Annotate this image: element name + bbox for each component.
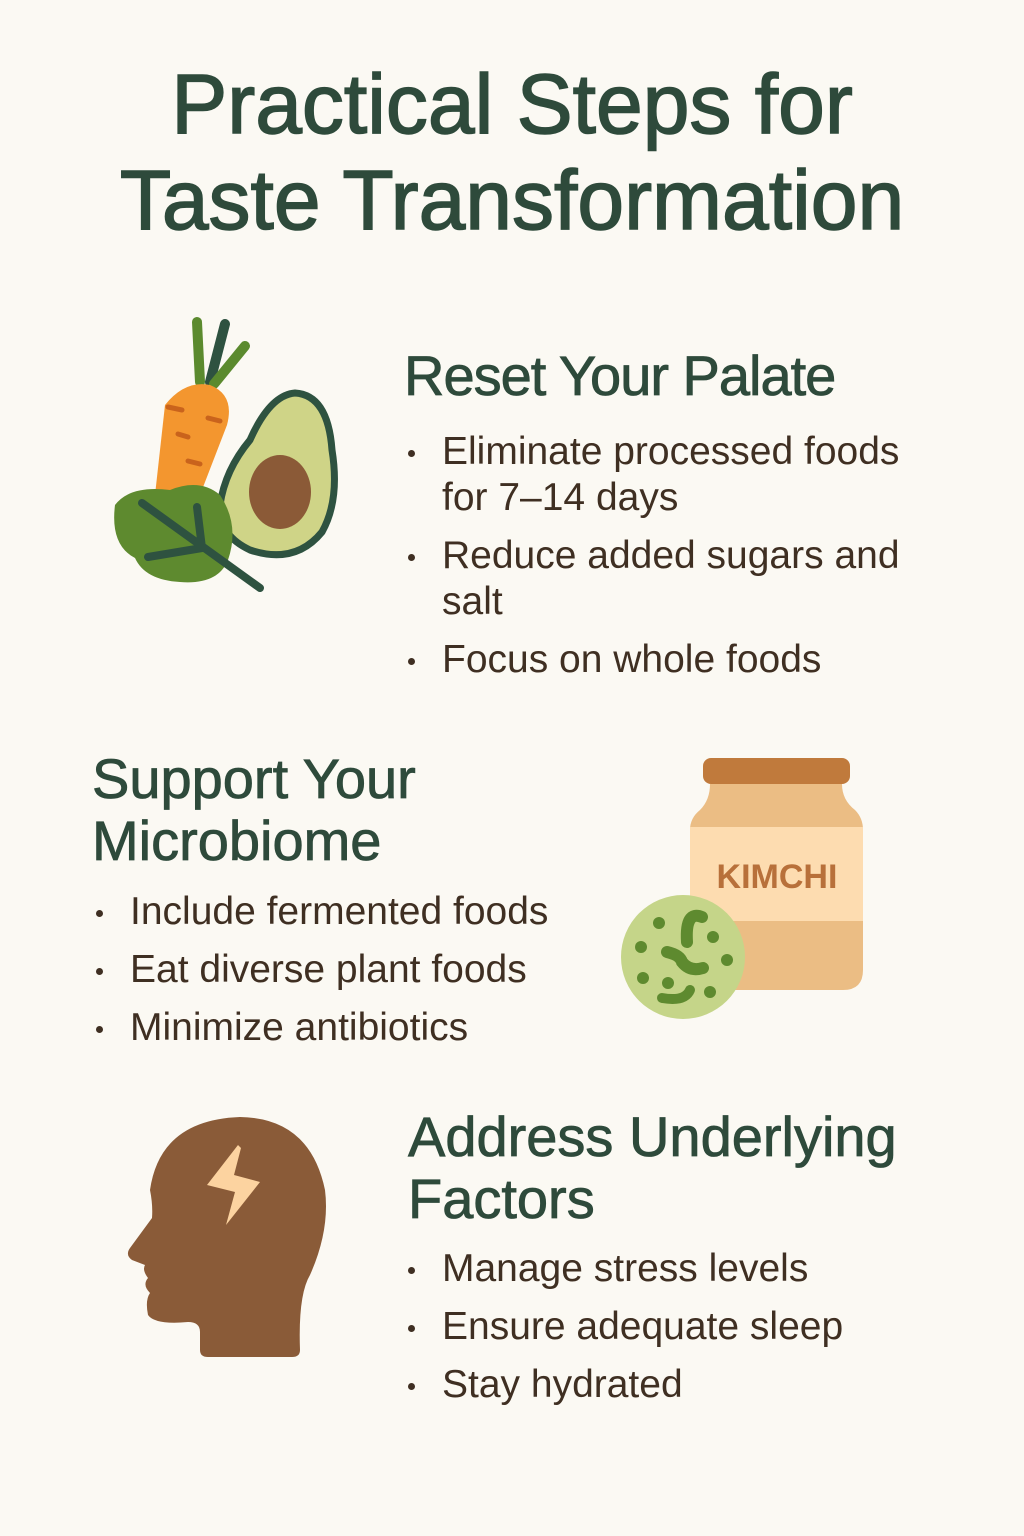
icon: kimchi jar xyxy=(621,758,863,1019)
icon: kimchi jar: KIMCHI xyxy=(717,858,837,896)
bullets: microbiome xyxy=(96,890,548,1049)
heading: microbiome: Support Your xyxy=(92,747,416,810)
heading: underlying factors xyxy=(408,1105,897,1230)
heading: underlying factors: Factors xyxy=(408,1167,595,1230)
section: reset your palate xyxy=(404,344,900,681)
bullets: factors: Manage stress levels xyxy=(442,1247,808,1290)
section: support your microbiome xyxy=(92,747,548,1049)
section: address underlying factors xyxy=(408,1105,897,1406)
heading: underlying factors: Address Underlying xyxy=(408,1105,897,1168)
bullets: reset: Focus on whole foods xyxy=(442,638,821,681)
title: Taste Transformation xyxy=(120,153,904,247)
heading: microbiome: Microbiome xyxy=(92,809,381,872)
bullets: reset xyxy=(408,430,900,681)
icon: vegetables xyxy=(114,317,338,592)
bullets: microbiome: Minimize antibiotics xyxy=(130,1006,468,1049)
bullets: factors: Stay hydrated xyxy=(442,1363,683,1406)
title xyxy=(120,57,904,247)
title: Practical Steps for xyxy=(171,57,853,151)
bullets: reset: salt xyxy=(442,580,503,623)
bullets: microbiome: Include fermented foods xyxy=(130,890,548,933)
heading: reset your palate: Reset Your Palate xyxy=(404,344,835,407)
bullets: microbiome: Eat diverse plant foods xyxy=(130,948,527,991)
bullets: reset: Reduce added sugars and xyxy=(442,534,900,577)
bullets: reset: for 7–14 days xyxy=(442,476,678,519)
bullets: factors xyxy=(408,1247,843,1406)
heading: microbiome xyxy=(92,747,416,872)
bullets: factors: Ensure adequate sleep xyxy=(442,1305,843,1348)
bullets: reset: Eliminate processed foods xyxy=(442,430,899,473)
icon: head with lightning xyxy=(128,1117,326,1357)
